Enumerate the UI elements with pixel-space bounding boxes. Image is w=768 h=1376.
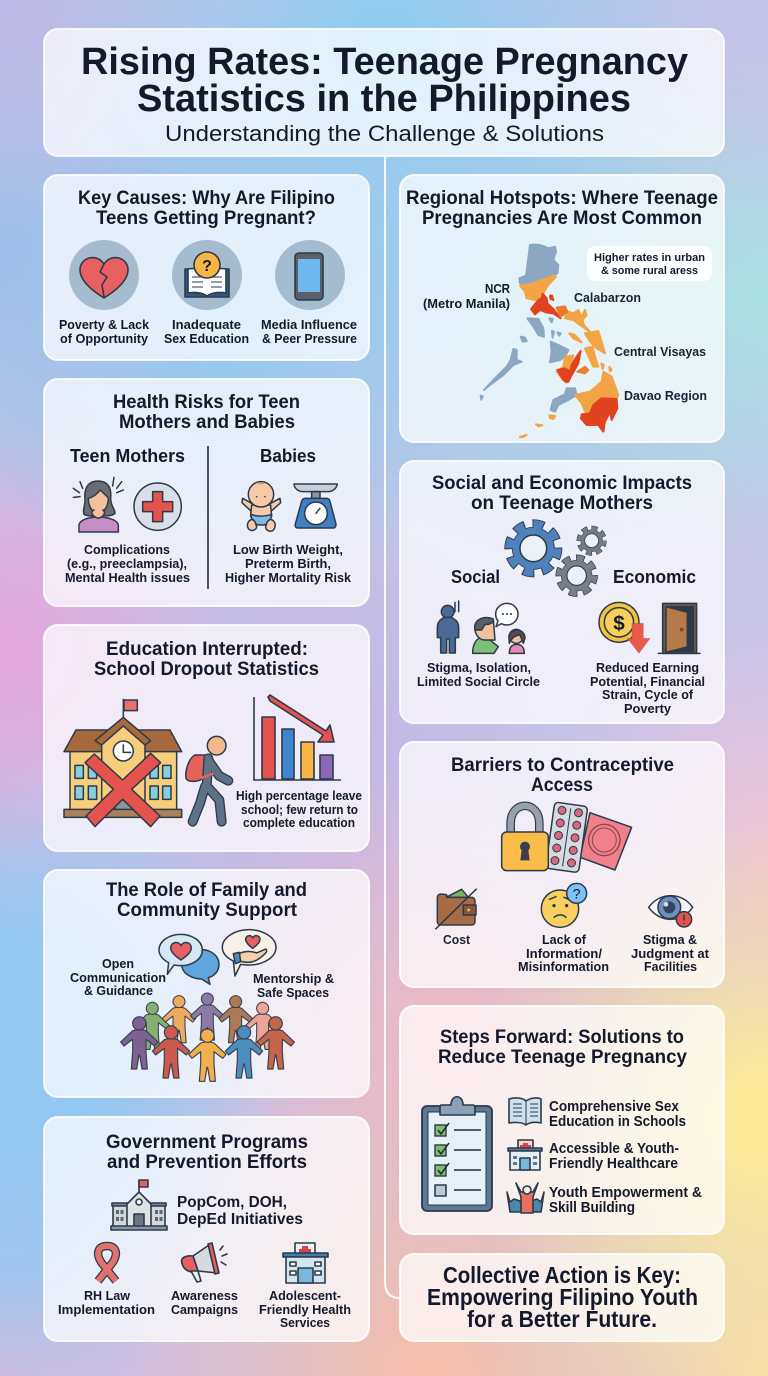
panel: government programs <box>44 1117 369 1341</box>
icon: book with question: ? <box>202 258 212 275</box>
label: Misinformation <box>518 960 609 974</box>
icon: pill pack <box>546 802 588 873</box>
heading <box>113 391 300 433</box>
label: Information/ <box>526 947 603 961</box>
label <box>549 1098 686 1130</box>
label: Education in Schools <box>549 1113 686 1130</box>
icon: condom packet <box>580 813 632 870</box>
caption: Poverty & Lack <box>59 318 149 332</box>
label <box>631 933 710 974</box>
caption: Higher Mortality Risk <box>225 571 351 585</box>
caption <box>590 661 705 716</box>
callout <box>587 246 712 281</box>
caption <box>59 318 149 346</box>
icon: phone <box>275 240 345 310</box>
heading: Government Programs <box>106 1131 308 1153</box>
label: Safe Spaces <box>257 986 329 1000</box>
label: Mentorship & <box>253 972 334 986</box>
closing message: Collective Action is Key: <box>443 1262 681 1288</box>
label: Davao Region: Davao Region <box>624 389 707 403</box>
label: Adolescent- <box>269 1289 341 1303</box>
caption: complete education <box>243 816 355 830</box>
subheading: babies: Babies <box>260 445 316 466</box>
icon: door <box>658 603 700 653</box>
label <box>171 1289 238 1317</box>
icon: health clinic <box>283 1243 328 1283</box>
icon: stressed mother <box>73 477 123 532</box>
heading: Access <box>531 774 593 796</box>
label: NCR: NCR <box>485 282 510 296</box>
subheading: economic: Economic <box>613 566 696 587</box>
map: philippines hotspots <box>481 245 618 437</box>
panel: key causes <box>44 175 369 360</box>
subheading: social: Social <box>451 566 500 587</box>
caption: Low Birth Weight, <box>233 543 343 557</box>
label <box>549 1184 702 1216</box>
label: NCR <box>423 282 510 311</box>
closing message <box>427 1262 698 1332</box>
icon: open book <box>509 1098 541 1125</box>
icon: speech bubbles with heart <box>159 934 219 984</box>
chart: declining bars <box>254 695 341 780</box>
label: NCR: (Metro Manila) <box>423 297 510 311</box>
label: Open <box>102 957 134 971</box>
panel: steps forward <box>400 1006 724 1234</box>
label <box>259 1289 351 1330</box>
panel: title <box>44 29 724 156</box>
subheading: teen mothers: Teen Mothers <box>70 445 185 466</box>
caption <box>261 318 357 346</box>
caption <box>225 543 351 585</box>
heading: and Prevention Efforts <box>107 1151 307 1173</box>
label: Services <box>280 1316 330 1330</box>
caption: Preterm Birth, <box>245 557 331 571</box>
caption: (e.g., preeclampsia), <box>67 557 187 571</box>
heading <box>451 754 674 796</box>
caption: of Opportunity <box>60 332 148 346</box>
panel: social and economic impacts <box>400 461 724 723</box>
label: Skill Building <box>549 1199 635 1216</box>
heading: Pregnancies Are Most Common <box>422 207 702 229</box>
label: Campaigns <box>171 1303 238 1317</box>
icon: medical cross <box>134 483 181 530</box>
heading: The Role of Family and <box>106 879 307 901</box>
subtitle: Understanding the Challenge & Solutions <box>165 121 604 146</box>
heading: Community Support <box>117 899 297 921</box>
label: Judgment at <box>631 947 710 961</box>
caption <box>236 789 362 830</box>
label: Communication <box>70 971 166 985</box>
heading: Education Interrupted: <box>106 638 308 660</box>
title: Statistics in the Philippines <box>137 78 631 120</box>
caption: Complications <box>84 543 170 557</box>
icon: student walking away <box>186 736 228 822</box>
closing message: for a Better Future. <box>467 1306 657 1332</box>
heading: Social and Economic Impacts <box>432 472 692 494</box>
caption: Reduced Earning <box>596 661 699 675</box>
label: Implementation <box>58 1303 155 1317</box>
label: Calabarzon: Calabarzon <box>574 291 641 305</box>
heading <box>106 1131 308 1173</box>
heading: Regional Hotspots: Where Teenage <box>406 187 718 209</box>
icon: broken heart <box>69 240 139 310</box>
closing message: Empowering Filipino Youth <box>427 1284 698 1310</box>
panel: barriers to contraceptive access <box>400 742 724 987</box>
caption: Mental Health issues <box>65 571 190 585</box>
label: & Guidance <box>84 984 153 998</box>
label: Friendly Health <box>259 1303 351 1317</box>
label <box>549 1140 679 1172</box>
label: Facilities <box>644 960 697 974</box>
caption: Strain, Cycle of <box>602 688 694 702</box>
callout: Higher rates in urban <box>594 252 705 264</box>
caption: Limited Social Circle <box>417 675 540 689</box>
heading: Barriers to Contraceptive <box>451 754 674 776</box>
heading: on Teenage Mothers <box>471 492 653 514</box>
label: RH Law <box>84 1289 130 1303</box>
icon: eye with alert <box>649 896 693 927</box>
icon: megaphone <box>182 1243 227 1282</box>
label <box>177 1194 303 1228</box>
label <box>253 972 334 1000</box>
heading <box>438 1026 687 1068</box>
panel: regional hotspots <box>400 175 724 442</box>
caption: school; few return to <box>241 803 358 817</box>
label <box>518 933 609 974</box>
heading: Steps Forward: Solutions to <box>440 1026 684 1048</box>
icon: people whispering <box>473 603 525 653</box>
caption: Sex Education <box>164 332 249 346</box>
icon: padlock <box>502 806 548 871</box>
panel: family and community <box>44 870 369 1097</box>
icon: book with question <box>172 240 242 310</box>
heading: Teens Getting Pregnant? <box>96 207 316 229</box>
caption: & Peer Pressure <box>262 332 357 346</box>
label: Lack of <box>542 933 587 947</box>
caption: Inadequate <box>172 318 241 332</box>
heading: Key Causes: Why Are Filipino <box>78 187 335 209</box>
heading: Mothers and Babies <box>119 411 295 433</box>
label: PopCom, DOH, <box>177 1194 287 1211</box>
caption <box>65 543 190 585</box>
label: Accessible & Youth- <box>549 1140 679 1157</box>
icon: gears <box>509 524 604 593</box>
icon: baby scale <box>294 484 337 528</box>
icon: youth raising hands <box>507 1183 544 1213</box>
icon: circle of people <box>121 993 294 1081</box>
heading: School Dropout Statistics <box>94 658 319 680</box>
label: Youth Empowerment & <box>549 1184 702 1201</box>
label: DepEd Initiatives <box>177 1211 303 1228</box>
icon: government building <box>111 1180 167 1230</box>
icon: coin with down arrow <box>599 602 650 653</box>
title: Rising Rates: Teenage Pregnancy <box>81 41 688 83</box>
icon: speech bubble with caring hand <box>222 930 276 976</box>
icon: wallet <box>435 889 477 929</box>
heading <box>78 187 335 229</box>
title <box>81 41 688 120</box>
caption: Stigma, Isolation, <box>427 661 531 675</box>
caption: Media Influence <box>261 318 357 332</box>
label: Comprehensive Sex <box>549 1098 680 1115</box>
heading <box>106 879 307 921</box>
icon: clipboard checklist <box>422 1097 492 1211</box>
label: Central Visayas: Central Visayas <box>614 345 706 359</box>
caption <box>164 318 249 346</box>
caption: Poverty <box>624 702 671 716</box>
label: Friendly Healthcare <box>549 1155 678 1172</box>
icon: baby <box>242 482 281 531</box>
icon: hospital <box>508 1140 542 1170</box>
panel: health risks <box>44 379 369 606</box>
label: Stigma & <box>643 933 697 947</box>
panel: education interrupted <box>44 625 369 851</box>
panel: collective action <box>400 1254 724 1341</box>
icon: school crossed out <box>64 699 182 827</box>
callout: & some rural aress <box>601 265 698 277</box>
label: Cost <box>443 933 471 947</box>
icon: confused face <box>541 883 587 927</box>
icon: awareness ribbon <box>98 1246 116 1281</box>
label: Awareness <box>171 1289 238 1303</box>
heading <box>94 638 319 680</box>
label <box>70 957 166 998</box>
label <box>58 1289 155 1317</box>
caption: High percentage leave <box>236 789 362 803</box>
heading: Reduce Teenage Pregnancy <box>438 1046 687 1068</box>
icon: isolated person <box>437 601 459 653</box>
heading <box>432 472 692 514</box>
caption <box>417 661 540 689</box>
icon: confused face: ? <box>573 885 581 901</box>
heading: Health Risks for Teen <box>113 391 300 413</box>
heading <box>406 187 718 229</box>
icon: coin with down arrow: $ <box>613 612 625 635</box>
caption: Potential, Financial <box>590 675 705 689</box>
